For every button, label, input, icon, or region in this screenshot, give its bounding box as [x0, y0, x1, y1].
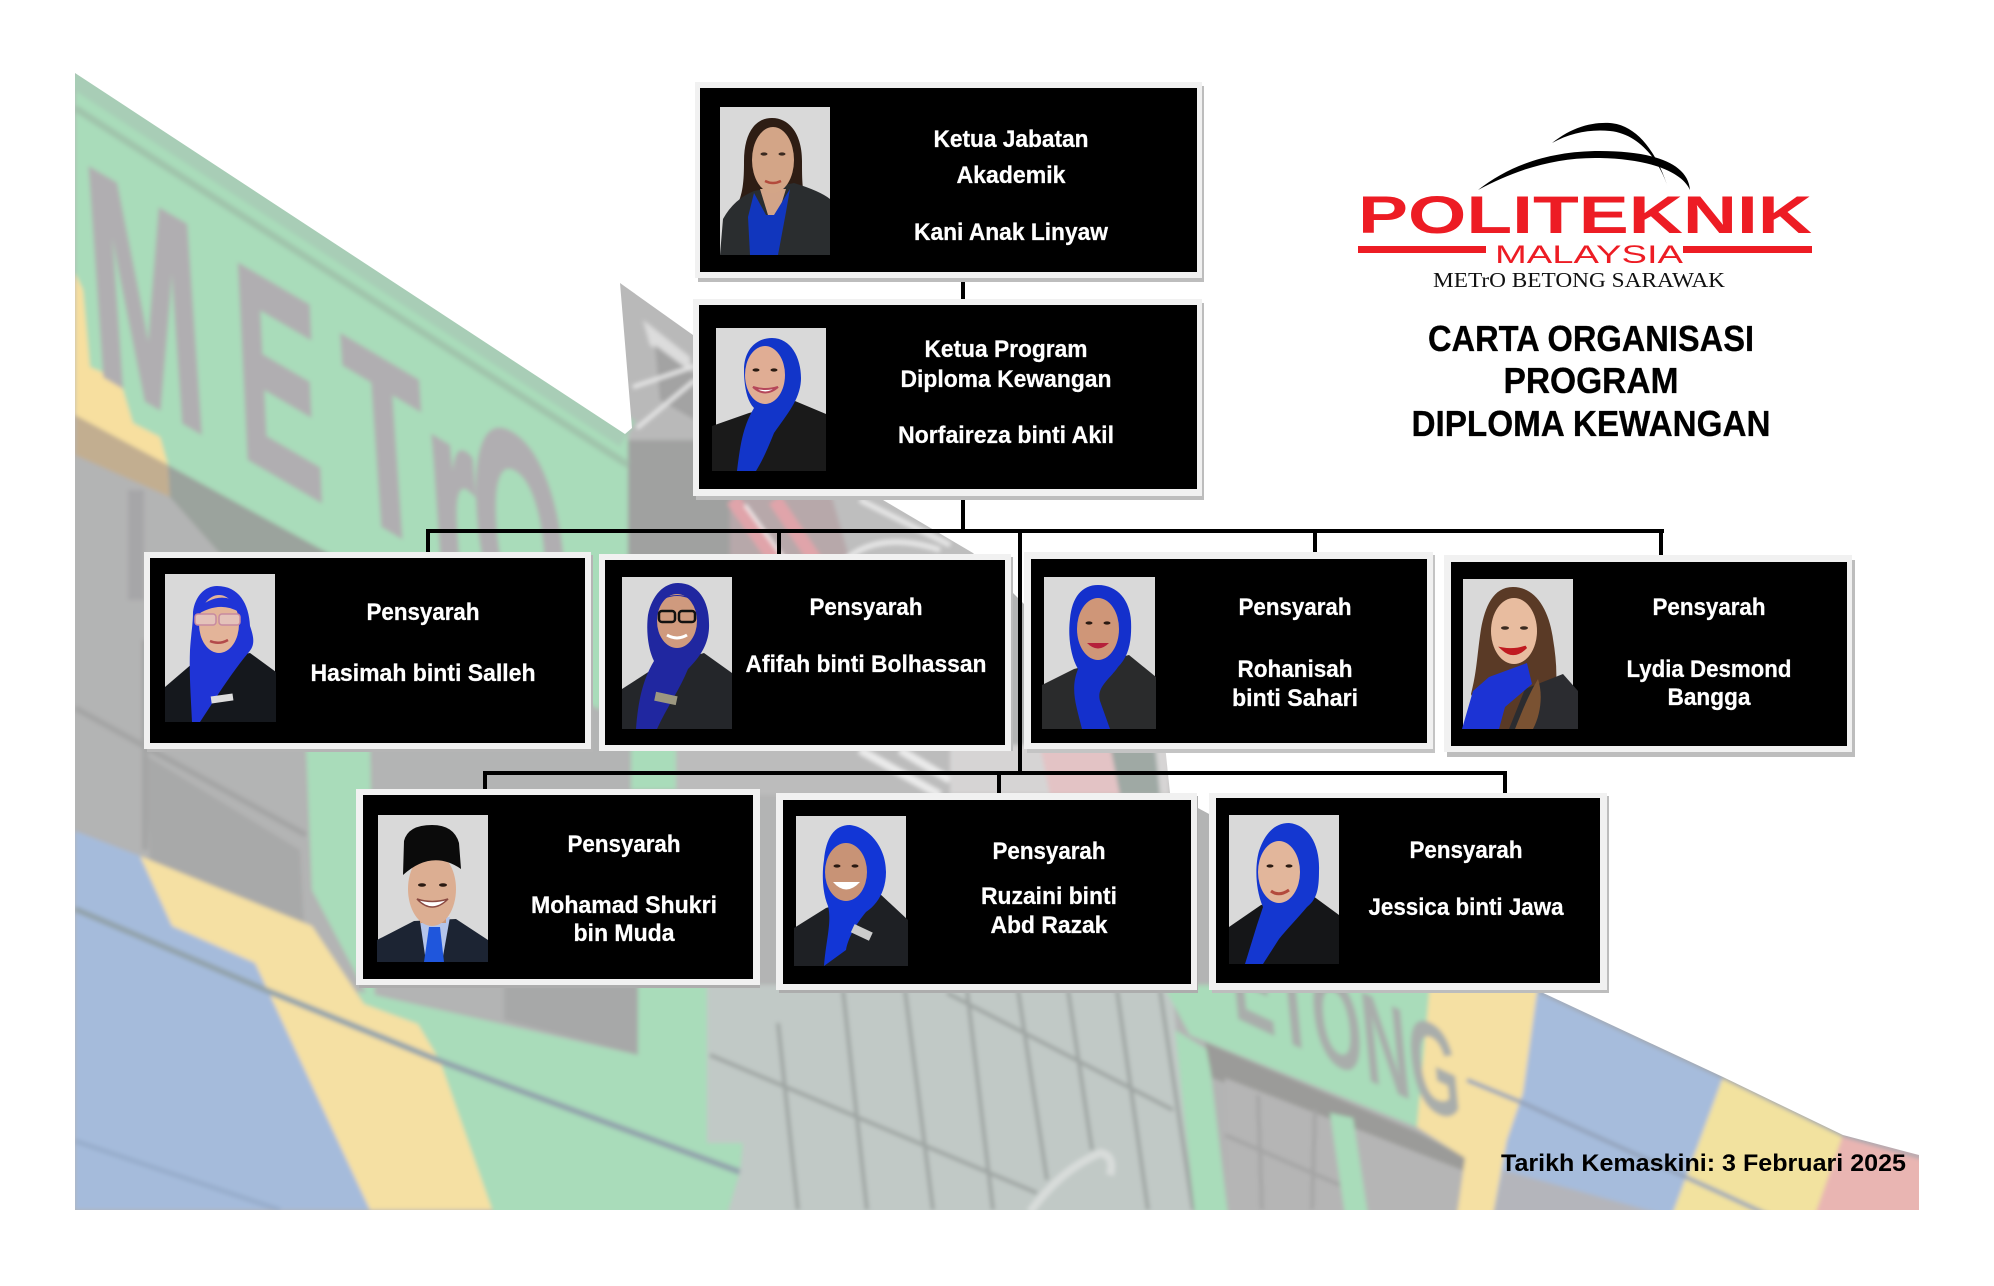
portrait: Kani Anak Linyaw [720, 107, 830, 255]
panel: Ketua Jabatan Akademik [695, 82, 1204, 282]
role and name: binti Sahari [1232, 685, 1358, 712]
role and name [1626, 594, 1792, 711]
logo: Politeknik Malaysia METrO Betong Sarawak: MALAYSIA [1495, 241, 1683, 269]
panel: Jessica binti Jawa [1209, 793, 1609, 993]
panel: Mohamad Shukri bin Muda [356, 789, 760, 988]
update date: Tarikh Kemaskini: 3 Februari 2025 [1501, 1150, 1906, 1177]
title: PROGRAM [1504, 360, 1678, 401]
role and name: Ketua Program [924, 336, 1088, 363]
role and name: Pensyarah [366, 599, 480, 626]
role and name: Diploma Kewangan [900, 366, 1112, 393]
panel: Ketua Program [693, 299, 1204, 500]
role and name: Norfaireza binti Akil [898, 422, 1114, 449]
role and name: Pensyarah [1410, 837, 1522, 864]
portrait: Lydia [1462, 579, 1578, 729]
building sign letters: M [76, 100, 214, 502]
building sign letters: T [336, 281, 435, 607]
role and name [1232, 594, 1358, 712]
building sign letters: r [416, 320, 490, 685]
title [1412, 318, 1770, 444]
role and name: Kani Anak Linyaw [914, 219, 1108, 246]
logo: Politeknik Malaysia METrO Betong Sarawak: METrO BETONG SARAWAK [1433, 268, 1725, 292]
role and name: Pensyarah [810, 594, 922, 621]
role and name: Abd Razak [990, 912, 1108, 939]
role and name [898, 336, 1114, 449]
portrait: Norfaireza binti Akil [712, 328, 826, 471]
role and name: Ruzaini binti [981, 883, 1117, 910]
role and name: bin Muda [574, 920, 675, 947]
logo: Politeknik Malaysia METrO Betong Sarawak [1358, 123, 1812, 292]
role and name: Jessica binti Jawa [1368, 894, 1564, 921]
portrait: Ruzaini [794, 816, 908, 966]
building sign letters: ETONG [1222, 901, 1467, 1153]
panel: Afifah binti Bolhassan [599, 554, 1013, 751]
role and name [914, 126, 1108, 246]
role and name: Afifah binti Bolhassan [746, 651, 986, 678]
role and name [746, 594, 986, 678]
panel: Rohanisah binti Sahari [1024, 552, 1435, 753]
portrait: Shukri [377, 815, 488, 962]
role and name [981, 838, 1117, 939]
role and name [310, 599, 536, 687]
role and name: Pensyarah [568, 831, 680, 858]
role and name [1368, 837, 1564, 921]
title: DIPLOMA KEWANGAN [1412, 403, 1770, 444]
role and name: Ketua Jabatan [934, 126, 1088, 153]
role and name: Bangga [1668, 684, 1751, 711]
role and name: Pensyarah [992, 838, 1106, 865]
role and name: Akademik [956, 162, 1066, 189]
role and name: Mohamad Shukri [531, 892, 717, 919]
panel: Ruzaini binti Abd Razak [776, 793, 1198, 993]
connector lines [426, 279, 1664, 795]
role and name: Pensyarah [1238, 594, 1352, 621]
building sign letters: E [227, 200, 329, 563]
portrait: Afifah [622, 577, 732, 729]
role and name [531, 831, 717, 947]
portrait: Rohanisah [1042, 577, 1156, 729]
panel: Hasimah binti Salleh [144, 552, 593, 752]
role and name: Pensyarah [1652, 594, 1766, 621]
portrait: Hasimah [165, 574, 276, 722]
panel: Lydia Desmond Bangga [1444, 555, 1855, 757]
building sign letters: O [461, 344, 580, 737]
building sign letters [76, 100, 1467, 1153]
portrait: Jessica [1229, 815, 1339, 964]
logo: Politeknik Malaysia METrO Betong Sarawak: POLITEKNIK [1358, 186, 1812, 245]
role and name: Hasimah binti Salleh [310, 660, 536, 687]
title: CARTA ORGANISASI [1428, 318, 1754, 359]
role and name: Rohanisah [1238, 656, 1352, 683]
role and name: Lydia Desmond [1626, 656, 1792, 683]
